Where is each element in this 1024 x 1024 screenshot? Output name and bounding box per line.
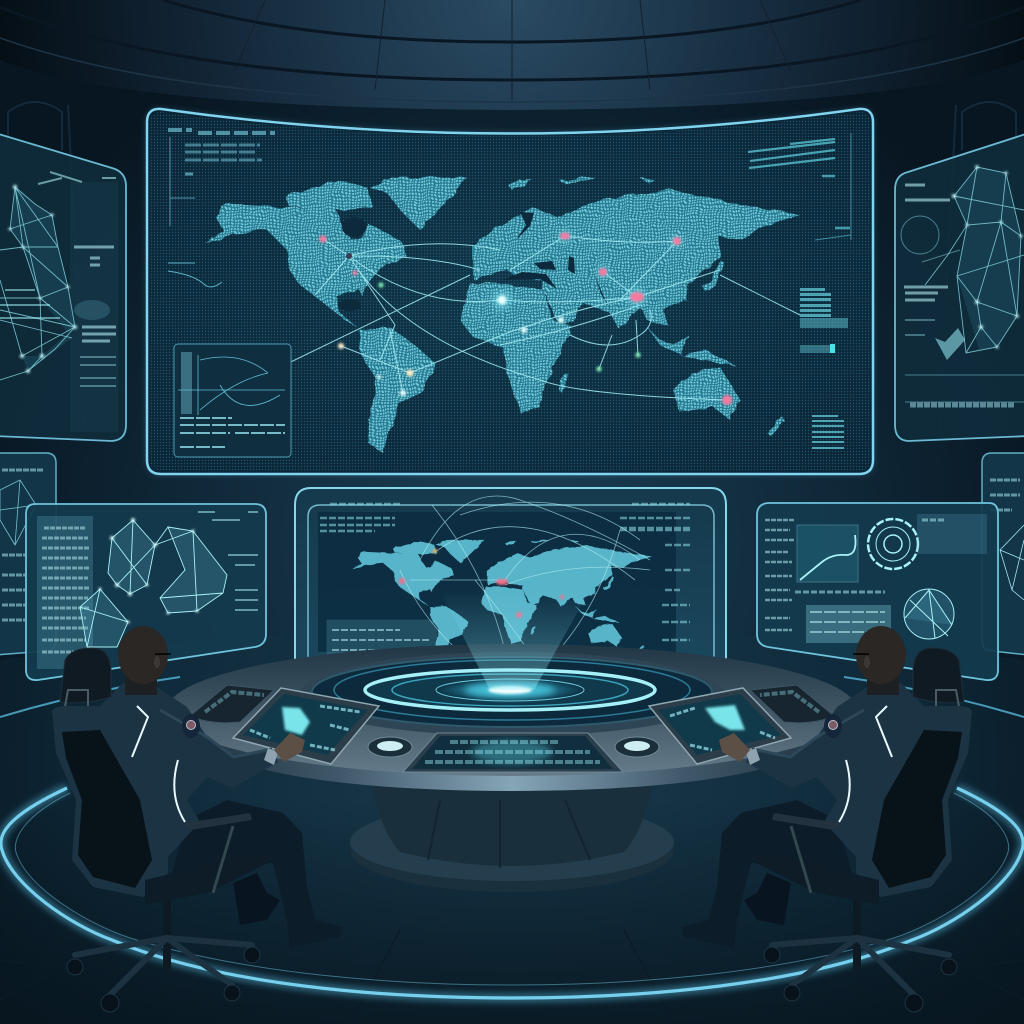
- mid-right analytics screen: [757, 503, 998, 680]
- pedestal: [372, 785, 652, 866]
- light beam: [440, 590, 590, 690]
- table block: [806, 605, 891, 643]
- wall columns: [8, 102, 1016, 500]
- central readouts: [320, 504, 690, 640]
- round table: [167, 644, 857, 892]
- table foot: [350, 808, 674, 892]
- wheels: [67, 947, 260, 1012]
- ceiling: [0, 0, 1024, 110]
- left dial: [368, 737, 412, 757]
- left tablet: [233, 688, 379, 764]
- top-right readout: [748, 133, 851, 240]
- far-right lower screen: [982, 453, 1024, 655]
- hand: [274, 733, 305, 762]
- central routes: [400, 496, 650, 690]
- far-left lower screen: [0, 453, 56, 655]
- network map: [925, 165, 1024, 353]
- left upper side screen: [0, 133, 126, 441]
- near leg: [170, 800, 342, 948]
- network map: [0, 185, 77, 380]
- center console panel: [403, 733, 623, 772]
- world map: [203, 177, 800, 453]
- neck and head: [118, 626, 171, 695]
- chair base: [75, 895, 252, 995]
- top-left readout: [168, 130, 275, 226]
- seat: [145, 850, 270, 905]
- text columns: [765, 520, 795, 630]
- network shapes: [80, 520, 227, 647]
- floor: [0, 630, 1024, 1024]
- table edge: [168, 708, 856, 791]
- right tablet: [649, 688, 791, 764]
- headrest: [60, 648, 111, 712]
- screen sidebar text: [901, 185, 1024, 405]
- left pacific labels: [168, 263, 222, 287]
- map nodes: [266, 230, 732, 405]
- armrest: [185, 813, 252, 893]
- right bar stats: [800, 288, 848, 449]
- back-right panel: [750, 685, 834, 723]
- chair back: [52, 706, 168, 897]
- main world map screen: [147, 109, 873, 474]
- route arcs: [268, 236, 800, 400]
- inner lip: [300, 652, 724, 736]
- central map screen: [294, 488, 727, 690]
- back-left panel: [190, 685, 274, 723]
- left operator and chair: [52, 626, 342, 1012]
- mid-left analytics screen: [26, 504, 266, 680]
- wrist cuff: [264, 748, 278, 765]
- right dial: [615, 737, 659, 757]
- table top: [167, 644, 857, 776]
- network globe: [904, 589, 954, 639]
- radar dial: [868, 519, 918, 569]
- far leg: [233, 873, 280, 925]
- data column: [37, 516, 93, 669]
- uniform light strips: [132, 706, 185, 822]
- right upper side screen: [895, 133, 1024, 441]
- side readouts: [198, 512, 258, 610]
- floor light ring: [0, 677, 1024, 998]
- data panel: [917, 514, 987, 554]
- right operator and chair: [682, 626, 972, 1012]
- hologram projector: [312, 590, 712, 727]
- data inset: [174, 344, 291, 457]
- shoulder badge: [182, 714, 200, 738]
- central world map: [351, 540, 652, 661]
- torso and arm: [100, 683, 278, 860]
- screen sidebar text: [38, 172, 118, 432]
- line chart panel: [797, 525, 858, 582]
